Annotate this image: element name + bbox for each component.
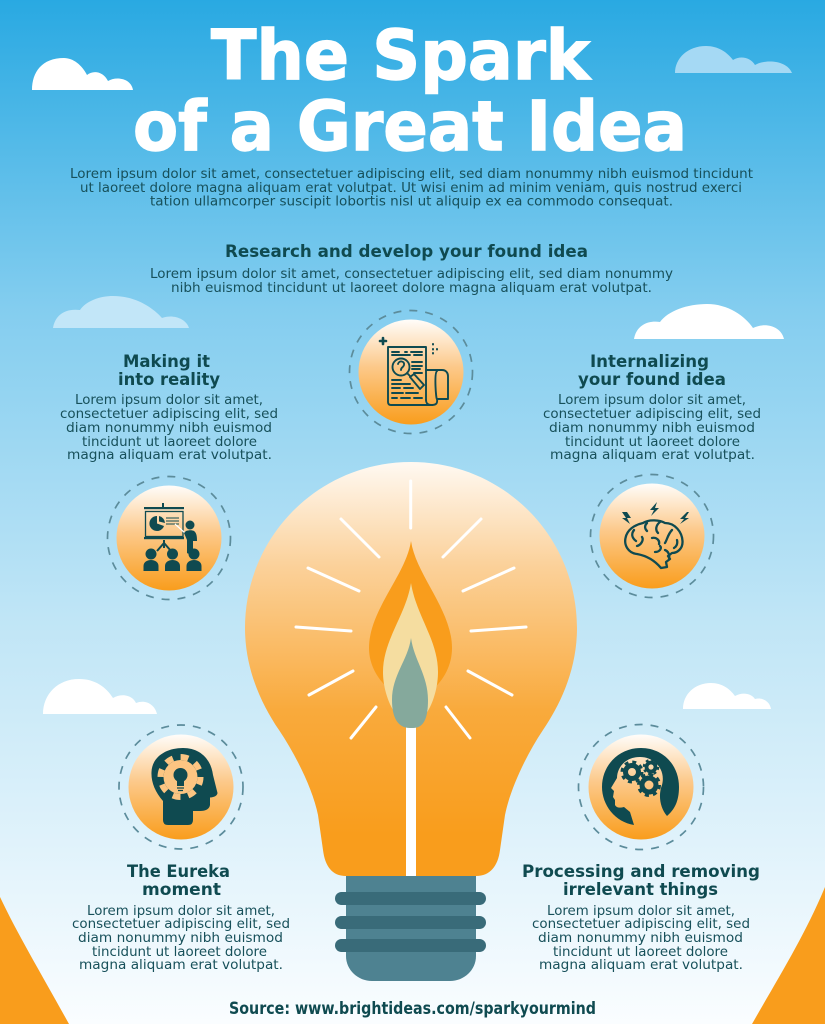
bulb glass [245, 462, 577, 876]
text: making it into reality: diam nonummy nibh euismod [66, 420, 272, 436]
text: making it into reality [60, 392, 278, 463]
heading: processing: Processing and removing [522, 862, 760, 882]
icon: presentation [108, 476, 230, 600]
source line: Source: www.brightideas.com/sparkyourmind [229, 999, 596, 1019]
heading: internalizing: Internalizing [590, 352, 709, 372]
heading: internalizing: your found idea [578, 370, 726, 390]
icon: brain [590, 474, 714, 598]
intro text [70, 166, 753, 210]
title [133, 16, 687, 167]
text: processing: consectetuer adipiscing elit, sed [532, 916, 750, 932]
heading: processing: irrelevant things [563, 880, 718, 900]
heading: internalizing [578, 352, 726, 390]
cloud: lower right [683, 683, 771, 709]
text: research: Lorem ipsum dolor sit amet, consectetuer adipiscing elit, sed diam nonummy [150, 266, 673, 282]
intro text: ut laoreet dolore magna aliquam erat volutpat. Ut wisi enim ad minim veniam, quis nostrud exerci [80, 180, 742, 196]
text: processing: tincidunt ut laoreet dolore [553, 944, 728, 960]
text: eureka: magna aliquam erat volutpat. [79, 957, 283, 973]
text: processing: magna aliquam erat volutpat. [539, 957, 743, 973]
heading: eureka: moment [142, 880, 221, 900]
right orange corner [752, 887, 825, 1024]
text: processing: diam nonummy nibh euismod [538, 930, 743, 946]
text: internalizing: consectetuer adipiscing elit, sed [543, 406, 761, 422]
text: internalizing: diam nonummy nibh euismod [549, 420, 755, 436]
left orange corner [0, 897, 69, 1024]
heading: eureka: The Eureka [127, 862, 230, 882]
text: internalizing: Lorem ipsum dolor sit amet, [558, 392, 746, 408]
text: eureka [72, 903, 290, 973]
text: making it into reality: magna aliquam erat volutpat. [67, 447, 272, 463]
text: research [150, 266, 673, 296]
title: of a Great Idea [133, 87, 687, 167]
text: processing: Lorem ipsum dolor sit amet, [547, 903, 735, 919]
heading: making it into reality: into reality [118, 370, 220, 390]
cloud: middle right [634, 304, 784, 339]
cloud: lower left [43, 679, 157, 714]
text: eureka: diam nonummy nibh euismod [78, 930, 283, 946]
cloud: top right [675, 46, 792, 73]
text: making it into reality: consectetuer adipiscing elit, sed [60, 406, 278, 422]
cloud: middle left [53, 296, 189, 328]
text: research: nibh euismod tincidunt ut laoreet dolore magna aliquam erat volutpat. [171, 280, 652, 296]
text: eureka: consectetuer adipiscing elit, sed [72, 916, 290, 932]
light bulb [245, 462, 577, 981]
icon: research document [350, 310, 472, 434]
flame [369, 541, 452, 728]
heading: making it into reality: Making it [123, 352, 210, 372]
text: internalizing: magna aliquam erat volutpat. [550, 447, 755, 463]
heading: making it into reality [118, 352, 220, 390]
light rays [296, 481, 526, 738]
text: making it into reality: tincidunt ut laoreet dolore [82, 434, 257, 450]
text: eureka: Lorem ipsum dolor sit amet, [87, 903, 275, 919]
intro text: Lorem ipsum dolor sit amet, consectetuer adipiscing elit, sed diam nonummy nibh euismod tincidunt [70, 166, 753, 182]
text: processing [532, 903, 750, 973]
text: making it into reality: Lorem ipsum dolor sit amet, [75, 392, 263, 408]
icon: processing head with gears [578, 724, 704, 850]
heading: processing [522, 862, 760, 900]
title: The Spark [211, 16, 592, 96]
cloud: top left [32, 58, 133, 90]
bulb screw base [335, 870, 486, 981]
intro text: tation ullamcorper suscipit lobortis nisl ut aliquip ex ea commodo consequat. [150, 194, 673, 210]
matchstick [406, 725, 416, 876]
heading: eureka [127, 862, 230, 900]
text: internalizing: tincidunt ut laoreet dolore [565, 434, 740, 450]
icon: eureka head [119, 725, 243, 849]
text: internalizing [543, 392, 761, 463]
text: eureka: tincidunt ut laoreet dolore [92, 944, 267, 960]
heading: research: Research and develop your found idea [225, 242, 588, 262]
